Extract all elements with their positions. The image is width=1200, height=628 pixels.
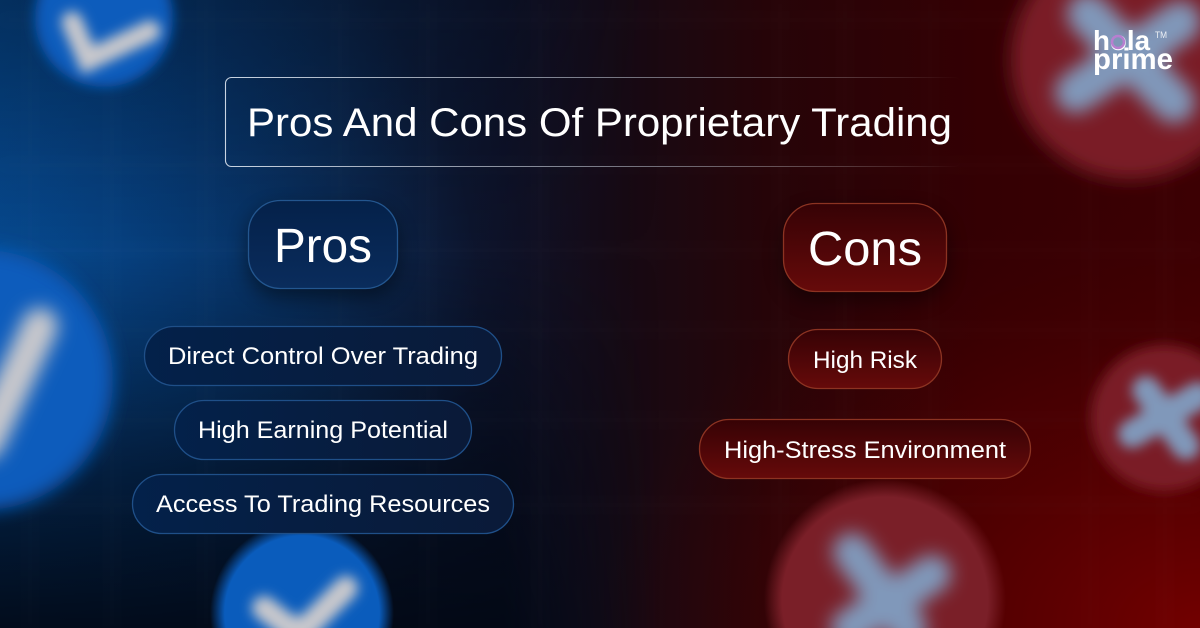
pill: access to trading resources: Access To Trading Resources (156, 491, 490, 518)
icon: blurred blue check, bottom (210, 521, 394, 628)
title box (226, 78, 960, 166)
pill: access to trading resources (132, 474, 514, 534)
pill: high-stress environment: High-Stress Environment (724, 437, 1006, 464)
pill: high earning potential (174, 400, 472, 460)
pill: high risk (788, 330, 942, 388)
pill: direct control over trading: Direct Control Over Trading (168, 343, 478, 370)
icon: blurred blue check, top left (35, 0, 173, 87)
heading: cons: Cons (808, 223, 922, 276)
title: Pros And Cons Of Proprietary Trading (247, 101, 952, 145)
pill: high risk: High Risk (813, 347, 918, 374)
icon: blurred red cross, top right (1011, 0, 1200, 179)
pill: direct control over trading (144, 326, 502, 386)
pill: high earning potential: High Earning Potential (198, 417, 448, 444)
panel: cons column (700, 204, 1030, 478)
panel: pros column (132, 200, 514, 534)
heading: pros (248, 200, 398, 297)
logo: hola prime: TM (1155, 30, 1167, 40)
icon: blurred blue check, left (0, 250, 113, 510)
logo: hola prime (1093, 25, 1173, 76)
heading: pros: Pros (274, 220, 372, 273)
icon: blurred red cross, bottom (764, 479, 1006, 628)
logo: hola prime: hola (1093, 25, 1150, 56)
heading: cons (783, 204, 947, 300)
icon: blurred red cross, right (1091, 345, 1200, 491)
pill: high-stress environment (700, 420, 1030, 478)
icon: logo ring (1112, 36, 1124, 48)
logo: hola prime: prime (1093, 43, 1173, 76)
